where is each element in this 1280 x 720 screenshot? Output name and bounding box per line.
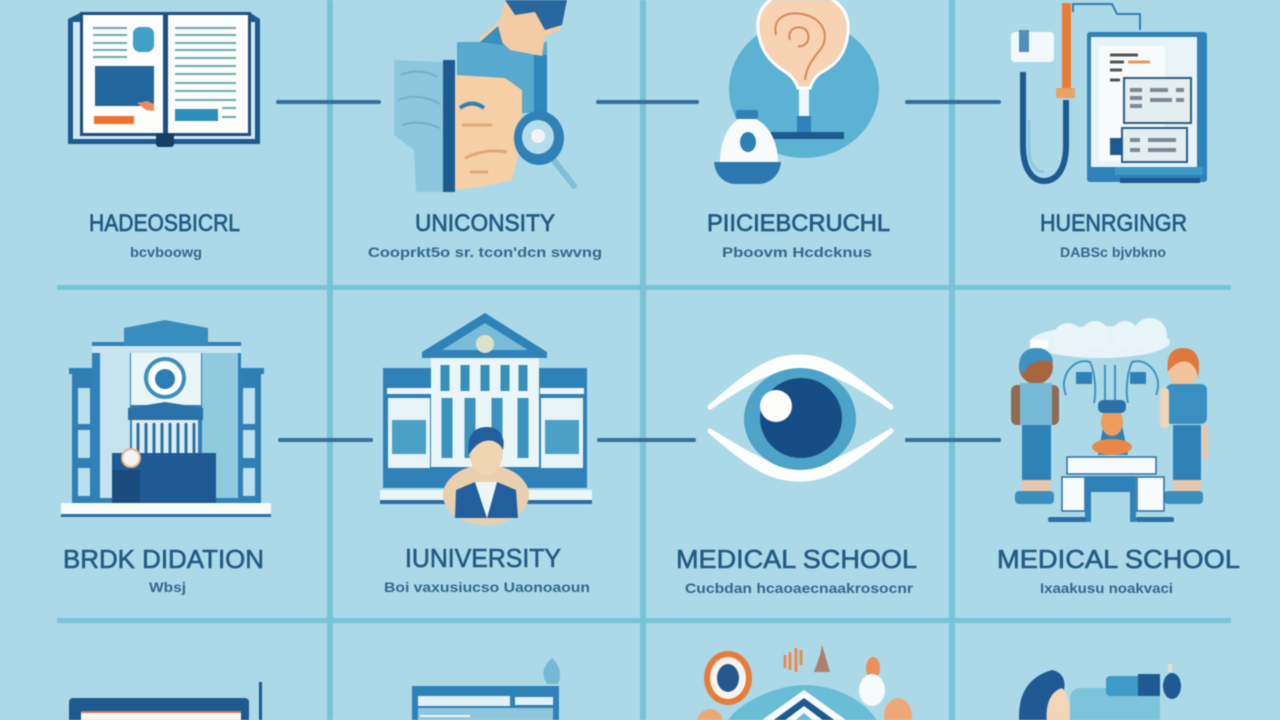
panel: row 3 column 2 (412, 658, 560, 720)
arrow: connector 1 (276, 100, 381, 104)
icon: stethoscope and tablet (1011, 3, 1207, 183)
description: Boi vaxusiucso Uaonoaoun (384, 580, 590, 595)
panel: row 1 column 4 (1011, 3, 1207, 260)
icon: university with graduate (380, 313, 592, 525)
heading: HADEOSBICRL (89, 210, 240, 237)
heading: UNICONSITY (415, 210, 555, 237)
heading: HUENRGINGR (1040, 210, 1187, 237)
panel: row 3 column 1 (69, 682, 262, 720)
description: DABSc bjvbkno (1060, 245, 1166, 260)
icon: house with badges (697, 645, 912, 720)
panel: row 3 column 4 (1019, 664, 1181, 720)
description: Cucbdan hcaoaecnaakrosocnr (685, 581, 914, 596)
arrow: connector 6 (905, 438, 1001, 442)
icon: head and magnifier (394, 0, 574, 192)
description: Ixaakusu noakvaci (1040, 581, 1173, 596)
icon: medical team (1011, 318, 1208, 522)
arrow: connector 3 (905, 100, 1001, 104)
icon: laptop (69, 682, 262, 720)
heading: MEDICAL SCHOOL (997, 544, 1240, 574)
panel: row 1 column 2 (368, 0, 602, 260)
panel: row 2 column 1 (61, 320, 271, 595)
panel: row 2 column 3 (676, 357, 917, 596)
arrow: connector 4 (278, 438, 373, 442)
panel: row 1 column 3 (707, 0, 890, 260)
description: Cooprkt5o sr. tcon'dcn swvng (368, 245, 602, 260)
heading: PIICIEBCRUCHL (707, 210, 890, 237)
heading: BRDK DIDATION (63, 544, 264, 574)
description: bcvboowg (130, 245, 202, 260)
description: Pboovm Hcdcknus (722, 245, 872, 260)
arrow: connector 5 (597, 438, 696, 442)
panel: row 3 column 3 (697, 645, 912, 720)
description: Wbsj (149, 580, 186, 595)
panel: row 2 column 4 (997, 318, 1240, 596)
icon: woman with equipment (1019, 664, 1181, 720)
icon: school building (61, 320, 271, 517)
icon: eye (710, 357, 891, 479)
arrow: connector 2 (596, 100, 699, 104)
icon: document screen (412, 658, 560, 720)
heading: MEDICAL SCHOOL (676, 544, 917, 574)
panel: row 1 column 1 (68, 12, 260, 260)
icon: brain and flask (714, 0, 879, 184)
icon: open book (68, 12, 260, 147)
panel: row 2 column 2 (380, 313, 592, 595)
heading: IUNIVERSITY (405, 543, 561, 573)
